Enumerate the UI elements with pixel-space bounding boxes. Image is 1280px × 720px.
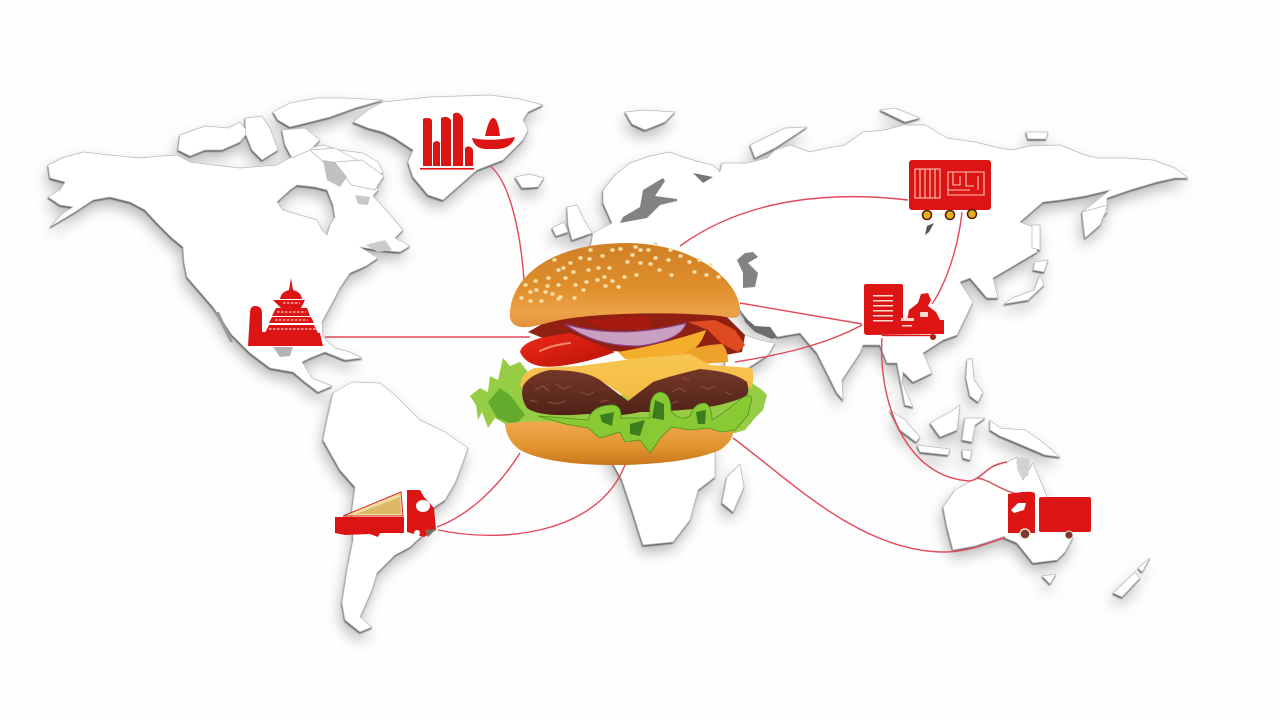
island: Ireland (552, 222, 568, 236)
Gulf of St Lawrence (365, 240, 392, 252)
line: Asia hub to burger upper (740, 303, 862, 324)
island: Great Britain (567, 205, 592, 240)
line: Asia hub to burger lower (735, 325, 862, 362)
mango slices (618, 330, 706, 360)
Foxe Basin (323, 160, 347, 187)
Great Lakes (355, 195, 370, 205)
icon: delivery truck in Australia (1008, 492, 1091, 539)
islands: New Zealand (1113, 558, 1150, 597)
inland seas (215, 160, 1030, 477)
line: Siberia to Asia hub (932, 212, 962, 304)
island: Iceland (515, 174, 544, 188)
arctic islands (178, 98, 384, 190)
icon: factory worker in Asia (864, 284, 944, 340)
tomato slice (520, 333, 615, 367)
cheese (520, 354, 753, 400)
Baltic Sea (620, 178, 677, 223)
islands: South-East Asia (890, 358, 1060, 460)
continent: Eurasia (590, 125, 1188, 407)
line: Greenland to burger (490, 166, 524, 280)
continent: South America (323, 382, 468, 632)
islands: Japan (1004, 205, 1108, 304)
line: South America to burger lower (438, 465, 625, 535)
Persian Gulf (742, 313, 777, 339)
White Sea (693, 173, 713, 183)
icon: container vehicle in Siberia (909, 160, 991, 220)
line: burger to Australia (733, 438, 1005, 552)
Lake Baikal (925, 223, 934, 235)
bottom bun (505, 421, 733, 465)
red pepper back and bacon (528, 310, 745, 356)
sesame seeds (521, 244, 719, 301)
line: Asia hub to Australia (882, 338, 1007, 481)
world map (48, 95, 1188, 632)
line: North America to burger (325, 336, 530, 338)
Torres Strait shadow (1016, 457, 1030, 477)
island: Greenland (353, 95, 543, 200)
continent: North America (48, 145, 410, 392)
icon: domed building (248, 278, 323, 346)
Gulf of California (215, 312, 233, 342)
peninsula: Arabia (725, 335, 775, 372)
islands: Svalbard and Arctic Russia (625, 108, 1048, 158)
line: Siberia to burger (680, 197, 908, 246)
top bun (510, 243, 740, 327)
lettuce back (470, 358, 767, 433)
burger (470, 243, 767, 465)
red onion (565, 323, 686, 346)
icon: bars and hat on Greenland (420, 113, 515, 170)
line: Australia truck branch (977, 478, 1017, 494)
island: Madagascar (722, 464, 744, 512)
island: Tasmania (1042, 574, 1056, 584)
beef patty (522, 369, 748, 416)
lettuce front (538, 392, 752, 453)
Caspian Sea (737, 252, 758, 288)
line: South America to burger upper (437, 453, 520, 527)
continent: Africa (600, 440, 715, 545)
Gulf of Mexico (273, 347, 293, 357)
continent: Australia (943, 457, 1073, 563)
supply lines (325, 166, 1017, 552)
icon: loaded truck in South America (335, 490, 436, 537)
